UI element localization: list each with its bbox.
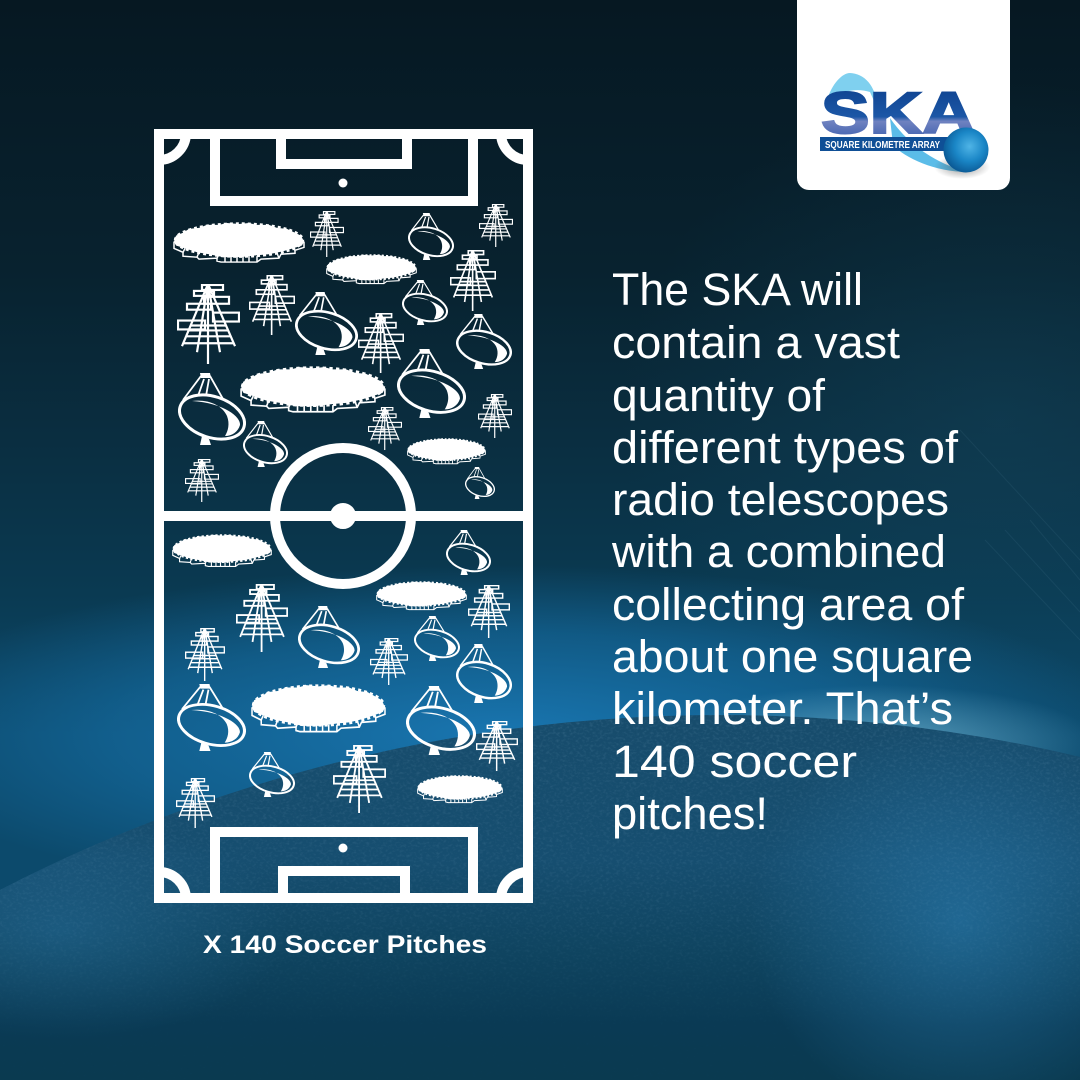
- body text block: different types of: [612, 422, 959, 473]
- background: planet Earth: [0, 700, 1080, 1080]
- icon: radio dish 4: [453, 314, 515, 370]
- icon: antenna tower 12: [186, 628, 224, 681]
- icon: antenna tower 11: [469, 585, 509, 638]
- icon: antenna tower 13: [371, 638, 407, 685]
- body text block: [611, 264, 973, 839]
- logo: SKA wordmark: SKA: [821, 81, 975, 146]
- body text block: about one square: [612, 631, 973, 682]
- logo: tagline bar: [820, 137, 950, 151]
- icon: station array 5: [173, 535, 271, 566]
- icon: radio dish 7: [240, 421, 291, 468]
- icon: station array 4: [408, 439, 485, 464]
- icon: antenna tower 16: [177, 778, 214, 828]
- icon: station array 6: [377, 582, 466, 610]
- body text block: with a combined: [611, 526, 946, 577]
- icon: radio dish 15: [246, 752, 298, 798]
- logo: swoosh shapes: [827, 73, 968, 172]
- icon: radio dish 2: [291, 292, 362, 357]
- body text block: radio telescopes: [612, 474, 949, 525]
- icon: antenna tower 6: [359, 313, 403, 373]
- icon: radio dish 10: [294, 606, 364, 670]
- body text block: kilometer. That’s: [612, 683, 953, 734]
- icon: antenna tower 4: [250, 275, 294, 335]
- icon: radio dish 13: [173, 684, 250, 753]
- icon: station array 8: [418, 776, 502, 803]
- logo card: [797, 0, 1010, 190]
- icon: radio dish 8: [463, 467, 497, 500]
- logo: blue sphere: [934, 128, 990, 179]
- body text block: quantity of: [612, 370, 825, 421]
- icon: radio dish 9: [443, 530, 494, 576]
- icon: antenna tower 1: [311, 211, 343, 257]
- icon: station array 2: [327, 255, 416, 284]
- icon: station array 3: [241, 367, 385, 412]
- icon: radio dish 14: [402, 686, 480, 757]
- icon: antenna tower 15: [334, 745, 385, 813]
- icon: antenna tower 3: [451, 250, 495, 311]
- logo: tagline bar: SQUARE KILOMETRE ARRAY: [825, 140, 940, 151]
- icon: antenna tower 8: [369, 407, 401, 450]
- icon: antenna tower 10: [237, 584, 287, 652]
- body text block: pitches!: [612, 788, 768, 839]
- icon: antenna tower 5: [178, 284, 239, 364]
- icon: radio dish 1: [405, 213, 457, 261]
- body text block: 140 soccer: [612, 736, 857, 787]
- icon: antenna tower 2: [480, 204, 512, 247]
- icon: radio dish 5: [393, 349, 470, 420]
- icon: antenna tower 7: [479, 394, 511, 438]
- icon: station array 1: [174, 223, 304, 262]
- icon: radio dish 3: [399, 280, 451, 326]
- telescope icons on the pitch: [173, 204, 517, 828]
- icon: station array 7: [252, 685, 385, 732]
- icon: radio dish 11: [411, 616, 463, 662]
- icon: antenna tower 14: [477, 721, 517, 771]
- body text block: contain a vast: [612, 317, 901, 368]
- body text block: The SKA will: [612, 264, 863, 315]
- icon: radio dish 6: [174, 373, 250, 447]
- pitch caption: X 140 Soccer Pitches: [203, 931, 487, 959]
- icon: antenna tower 9: [186, 459, 218, 502]
- body text block: collecting area of: [612, 579, 965, 630]
- soccer pitch outline: [159, 134, 528, 898]
- icon: radio dish 12: [453, 644, 515, 705]
